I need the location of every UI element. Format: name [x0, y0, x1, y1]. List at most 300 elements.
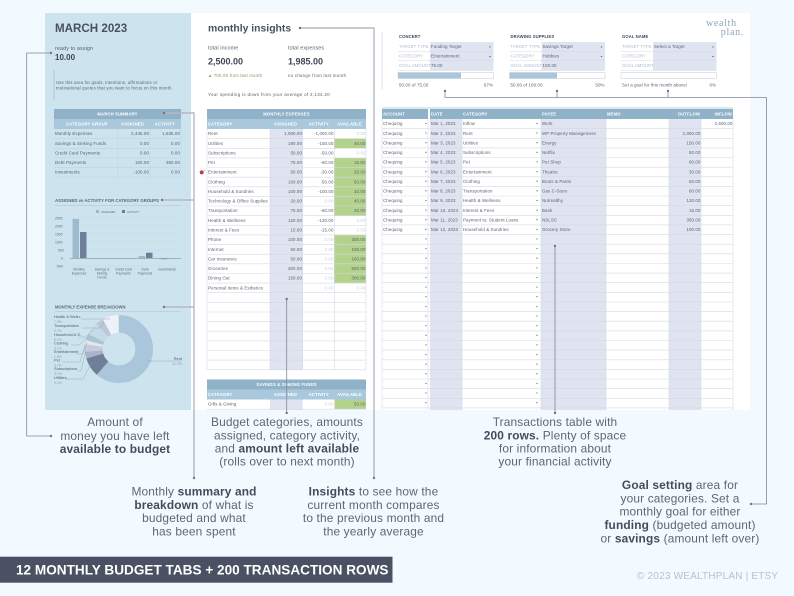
goal: concert	[398, 34, 494, 88]
panel: monthly insights: 2,500.00	[208, 56, 243, 66]
table: transactions: Energy	[542, 140, 557, 146]
table: March summary: 350.00	[166, 160, 180, 165]
chart: assigned vs activity: Credit Card	[115, 268, 132, 272]
panel: monthly insights: 1,985.00	[288, 56, 323, 66]
caption: goal setting: (budgeted amount)	[649, 518, 756, 532]
chart: assigned vs activity: ACTIVITY	[127, 210, 140, 214]
panel: monthly insights	[208, 24, 347, 97]
caption: budget categories: Budget categories, amounts	[211, 415, 363, 429]
table: transactions: Chequing	[383, 160, 403, 165]
panel: monthly insights: ▲ 700.00 from last month	[208, 73, 263, 78]
table: savings and sinking funds: ACTIVITY	[309, 392, 329, 397]
panel: monthly insights: Your spending is down from your average of 2,134.20	[208, 92, 330, 97]
goal: concert: Funding Target	[431, 44, 462, 49]
table: monthly expenses: 100.00	[288, 237, 302, 242]
goal: drawing supplies: 100.00	[542, 63, 557, 68]
table: transactions: Mar 7, 2023	[431, 179, 456, 184]
table: monthly expenses: AVAILABLE	[337, 122, 362, 126]
goal: drawing supplies	[510, 34, 605, 88]
table: monthly expenses: Personal Items & Esthetics	[208, 285, 264, 290]
chart: monthly expense breakdown: Subscriptions	[54, 366, 77, 371]
connector: transactions to caption	[554, 245, 556, 414]
note area	[54, 70, 173, 100]
logo: wealth plan: plan.	[721, 27, 744, 38]
table: transactions: Bank	[542, 208, 553, 213]
goal: concert: GOAL AMOUNT	[399, 63, 431, 68]
table: monthly expenses: 50.00	[354, 179, 366, 184]
goal: drawing supplies: CATEGORY	[510, 54, 535, 58]
table: monthly expenses: Utilities	[208, 141, 224, 146]
goals: savings and funding targets	[382, 32, 716, 90]
panel: monthly insights: total expenses	[288, 46, 324, 52]
goal: concert: TARGET TYPE	[399, 44, 429, 49]
table: transactions: 50.00	[689, 150, 701, 155]
table: March summary: Monthly Expenses	[55, 131, 93, 136]
goal: concert: CATEGORY	[399, 54, 423, 58]
caption: goal setting: monthly goal for either	[619, 504, 741, 518]
table: transactions: 50.00	[689, 179, 701, 184]
table: March summary: Credit Card Payments	[55, 150, 101, 156]
table: monthly expenses: Rent	[208, 131, 218, 136]
table: transactions: Mar 5, 2023	[431, 160, 456, 165]
table: monthly expenses: -50.00	[320, 150, 334, 156]
table: monthly expenses: Entertainment	[208, 170, 237, 175]
chart: monthly expense breakdown: 1.9%	[54, 355, 62, 359]
table: March summary	[54, 109, 181, 177]
table: monthly expenses: 150.00	[288, 276, 302, 281]
table: monthly expenses: 120.00	[288, 218, 302, 223]
table: monthly expenses: 0.00	[357, 228, 366, 232]
chart: monthly expense breakdown: 6.1%	[54, 338, 62, 342]
goal: empty goal name	[621, 34, 716, 88]
caption: transactions table: Plenty of space	[539, 428, 627, 442]
caption: transactions table: your financial activity	[498, 454, 612, 468]
table: transactions: Gas C-Store	[542, 189, 568, 194]
table: transactions: PAYEE	[542, 112, 556, 116]
goal: empty goal name: GOAL NAME	[622, 34, 649, 39]
table: monthly expenses: CATEGORY	[208, 122, 233, 126]
table: savings and sinking funds: 0.00	[325, 402, 334, 407]
table: monthly expenses: 600.00	[351, 266, 366, 271]
chart: assigned vs activity: Expenses	[72, 272, 87, 276]
table: transactions: 150.00	[686, 140, 701, 146]
table: transactions: OUTFLOW	[678, 112, 700, 116]
table: transactions: Mar 1, 2023	[431, 121, 456, 126]
table: transactions: Clothing	[463, 179, 480, 184]
table: monthly expenses: 50.00	[290, 150, 302, 156]
chart: assigned vs activity: 2500	[55, 216, 63, 220]
table: savings and sinking funds: 50.00	[354, 402, 366, 407]
table: monthly expenses: 50.00	[290, 256, 302, 261]
table: transactions: Theatre	[542, 169, 558, 174]
chart: assigned vs activity: Payments	[138, 272, 153, 276]
table: transactions: Chequing	[383, 179, 403, 184]
connector: budget categories to caption	[286, 298, 288, 414]
table: monthly expenses: 0.00	[357, 150, 366, 156]
goal: concert: 75.00	[431, 63, 443, 68]
goal: concert: Entertainment	[431, 54, 460, 58]
chart: monthly expense breakdown: Household & S..	[54, 332, 82, 337]
table: March summary: 0.00	[140, 141, 149, 146]
table: monthly expenses: -30.00	[320, 170, 334, 175]
table: monthly expenses: -1,000.00	[314, 131, 334, 136]
table: monthly expenses: 100.00	[351, 247, 366, 252]
chart: assigned vs activity: Savings &	[95, 268, 110, 272]
goal: concert: 50.00 of 75.00	[399, 82, 429, 88]
table: transactions: Work	[542, 121, 553, 126]
note area: motivational quotes that you want to focus on this month.	[56, 85, 173, 90]
goal: drawing supplies: Savings Target	[542, 44, 574, 49]
chart: monthly expense breakdown: 9.2%	[54, 381, 62, 385]
table: monthly expenses: 50.00	[290, 247, 302, 252]
caption: summary and breakdown: of what is	[198, 498, 254, 512]
table: monthly expenses: 0.00	[325, 266, 334, 271]
caption: goal setting: Goal setting area for	[622, 478, 738, 492]
table: monthly expenses: 40.00	[354, 141, 366, 146]
table: transactions: Grocery Store	[542, 227, 571, 232]
chart: monthly expense breakdown: Utilities	[54, 375, 67, 380]
table: savings and sinking funds: ASSIGNED	[274, 392, 297, 397]
table: monthly expenses: 0.00	[325, 247, 334, 252]
goal: drawing supplies: TARGET TYPE	[510, 44, 540, 49]
table: transactions: Nutrealthy	[542, 198, 564, 203]
table: transactions: NSLSC	[542, 218, 557, 222]
table: monthly expenses: 20.00	[354, 208, 366, 213]
chart: monthly expense breakdown: Health & Welln..	[54, 314, 82, 319]
caption: amount left to budget: money you have left	[60, 429, 170, 443]
goal: empty goal name: GOAL AMOUNT	[622, 63, 654, 68]
caption: budget categories: assigned, category activity,	[214, 428, 360, 442]
table: monthly expenses: 15.00	[290, 228, 302, 232]
caption: summary and breakdown: has been spent	[152, 524, 236, 538]
table: transactions: INFLOW	[715, 112, 732, 116]
caption: budget categories: (rolls over to next month)	[219, 454, 355, 468]
caption: insights: the yearly average	[323, 524, 424, 538]
table: transactions: CATEGORY	[463, 112, 488, 116]
table: monthly expenses: Pet	[208, 160, 216, 165]
table: transactions: Health & Wellness	[463, 198, 501, 203]
table: March summary: 0.00	[171, 150, 180, 156]
chart: assigned vs activity: 0	[61, 256, 63, 260]
table: monthly expenses: 300.00	[351, 276, 366, 281]
table: monthly expenses: 10.00	[354, 189, 366, 194]
caption: summary and breakdown: Monthly summary and	[131, 484, 257, 498]
chart: assigned vs activity: 500	[58, 248, 64, 252]
panel: monthly insights: total income	[208, 46, 238, 52]
table: monthly expenses: 1,000.00	[284, 131, 302, 136]
panel: monthly insights: monthly insights	[208, 24, 291, 34]
copyright: © 2023 WEALTHPLAN | ETSY	[637, 571, 778, 582]
table: monthly expenses: Internet	[208, 247, 224, 252]
table: monthly expenses: 0.00	[357, 285, 366, 290]
banner: tabs and rows: 12 MONTHLY BUDGET TABS + 200 TRANSACTION ROWS	[16, 563, 388, 578]
connector: insights to caption	[299, 27, 375, 479]
table: monthly expenses: 190.00	[288, 141, 302, 146]
table: transactions: Netflix	[542, 150, 556, 155]
connector: summary and breakdown to caption	[161, 112, 195, 479]
ready to assign amount: ready to assign	[55, 46, 93, 52]
table: monthly expenses: 100.00	[288, 189, 302, 194]
table: monthly expenses: 160.00	[351, 256, 366, 261]
table: monthly expenses: 0.00	[325, 237, 334, 242]
goal: drawing supplies: 50.00 of 100.00	[510, 82, 543, 88]
heading: March 2023: MARCH 2023	[55, 22, 128, 35]
chart: monthly expense breakdown: 3.1%	[54, 372, 62, 376]
table: transactions: Pet	[463, 160, 471, 165]
table: transactions	[382, 108, 733, 410]
table: transactions: 350.00	[686, 218, 701, 222]
table: monthly expenses: ACTIVITY	[309, 122, 329, 126]
goal: concert: CONCERT	[399, 34, 421, 39]
chart: monthly expense breakdown: 3.1%	[54, 346, 62, 350]
caption: insights: to the previous month and	[303, 511, 444, 525]
table: monthly expenses	[207, 109, 366, 370]
chart: monthly expense breakdown: Pet	[54, 358, 61, 362]
chart: assigned vs activity	[55, 198, 181, 280]
chart: assigned vs activity: ASSIGNED vs ACTIVITY FOR CATEGORY GROUPS	[55, 198, 159, 203]
banner: tabs and rows	[0, 557, 392, 583]
table: monthly expenses: 75.00	[290, 160, 302, 165]
chart: assigned vs activity: 1000	[55, 240, 63, 244]
table: monthly expenses: 40.00	[354, 199, 366, 204]
table: transactions: Chequing	[383, 189, 403, 194]
chart: monthly expense breakdown: 3.7%	[54, 364, 62, 368]
table: savings and sinking funds	[207, 380, 366, 410]
table: savings and sinking funds: CATEGORY	[208, 392, 233, 397]
table: transactions: Mar 3, 2023	[431, 140, 456, 146]
icon: red marker	[200, 170, 205, 174]
goal: empty goal name: Select a Target	[654, 44, 685, 49]
table: transactions: Subscriptions	[463, 150, 491, 155]
chart: assigned vs activity: Funds	[97, 276, 107, 280]
table: monthly expenses: 15.00	[354, 160, 366, 165]
table: monthly expenses: Phone	[208, 237, 222, 242]
caption: insights: current month compares	[307, 498, 440, 512]
table: transactions: ACCOUNT	[383, 112, 405, 116]
table: transactions: 2,500.00	[715, 121, 733, 126]
table: March summary: ACTIVITY	[155, 122, 175, 126]
table: transactions: Utilities	[463, 140, 479, 146]
table: transactions: Chequing	[383, 150, 403, 155]
goal: drawing supplies: Hobbies	[542, 54, 560, 58]
table: savings and sinking funds: Gifts & Giving	[208, 402, 237, 407]
table: monthly expenses: 0.00	[325, 199, 334, 204]
table: monthly expenses: Dining Out	[208, 276, 230, 281]
chart: assigned vs activity: ASSIGNED	[101, 210, 115, 214]
table: March summary: CATEGORY GROUP	[66, 122, 108, 126]
table: monthly expenses: Clothing	[208, 179, 225, 184]
table: transactions: Chequing	[383, 121, 403, 126]
table: March summary: 0.00	[140, 150, 149, 156]
table: savings and sinking funds: SAVINGS & SINKING FUNDS	[256, 382, 317, 387]
table: monthly expenses: Interest & Fees	[208, 228, 240, 232]
chart: assigned vs activity: Debt	[142, 268, 149, 272]
table: monthly expenses: 75.00	[290, 208, 302, 213]
table: transactions: Mar 10, 2023	[431, 208, 459, 213]
ready to assign amount	[55, 46, 93, 62]
table: savings and sinking funds: AVAILABLE	[337, 392, 362, 397]
table: monthly expenses: -50.00	[320, 179, 334, 184]
table: transactions: Chequing	[383, 131, 403, 136]
chart: assigned vs activity: 2000	[55, 224, 63, 228]
goal: drawing supplies: DRAWING SUPPLIES	[510, 34, 554, 39]
table: transactions: Mar 11, 2023	[431, 218, 458, 222]
caption: goal setting: or	[600, 532, 615, 546]
table: transactions: MEMO	[607, 112, 621, 116]
table: March summary: 0.00	[171, 141, 180, 146]
table: transactions: Mar 12, 2023	[431, 227, 459, 232]
table: transactions: Chequing	[383, 169, 403, 174]
goal: drawing supplies: GOAL AMOUNT	[510, 63, 542, 68]
table: transactions: WP Property Management	[542, 131, 597, 136]
table: transactions: Transportation	[463, 189, 493, 194]
table: transactions: 120.00	[686, 198, 701, 203]
chart: monthly expense breakdown	[54, 304, 183, 385]
table: monthly expenses: Household & Sundries	[208, 189, 254, 194]
chart: monthly expense breakdown: 61.2%	[172, 362, 182, 366]
caption: transactions table: 200 rows.	[484, 428, 539, 442]
table: transactions: Entertainment	[463, 169, 492, 174]
table: transactions: 60.00	[689, 160, 701, 165]
chart: monthly expense breakdown: 7.3%	[54, 320, 62, 324]
table: transactions: Mar 8, 2023	[431, 189, 456, 194]
caption: transactions table: Transactions table with	[493, 415, 617, 429]
table: transactions: 30.00	[689, 169, 701, 174]
table: March summary: Investments	[55, 170, 80, 175]
table: monthly expenses: 0.00	[325, 285, 334, 290]
chart: assigned vs activity: Sinking	[97, 272, 108, 276]
chart: assigned vs activity: Payments	[116, 272, 131, 276]
table: monthly expenses: Transportation	[208, 208, 238, 213]
table: transactions: Chequing	[383, 218, 403, 222]
table: March summary: 0.00	[171, 170, 180, 175]
table: monthly expenses: 50.00	[290, 170, 302, 175]
table: March summary: ASSIGNED	[121, 122, 144, 126]
table: monthly expenses: 100.00	[288, 179, 302, 184]
logo: wealth plan	[706, 18, 744, 38]
table: monthly expenses: -60.00	[320, 160, 334, 165]
table: transactions: Pet Shop	[542, 160, 561, 165]
chart: assigned vs activity: 1500	[55, 232, 63, 236]
chart: assigned vs activity: -500	[56, 264, 63, 268]
table: monthly expenses: 0.00	[325, 256, 334, 261]
caption: transactions table: for information about	[499, 442, 612, 456]
chart: monthly expense breakdown: Clothing	[54, 340, 68, 346]
chart: assigned vs activity: Monthly	[73, 268, 85, 272]
table: monthly expenses: 300.00	[288, 266, 302, 271]
chart: monthly expense breakdown: 3.7%	[54, 329, 62, 333]
table: monthly expenses: 0.00	[325, 276, 334, 281]
table: monthly expenses: 20.00	[354, 170, 366, 175]
chart: monthly expense breakdown: Rent	[174, 356, 183, 361]
table: transactions: Payment to: Student Loans	[463, 218, 519, 222]
caption: amount left to budget: Amount of	[87, 415, 143, 429]
table: transactions: Chequing	[383, 198, 403, 203]
table: monthly expenses: -120.00	[318, 218, 334, 223]
caption: budget categories: and	[215, 442, 238, 456]
table: transactions: Mar 2, 2023	[431, 131, 456, 136]
table: transactions: DATE	[431, 112, 443, 116]
table: monthly expenses: 200.00	[351, 237, 366, 242]
table: transactions: Inflow	[463, 121, 476, 126]
table: monthly expenses: MONTHLY EXPENSES	[263, 112, 310, 116]
table: monthly expenses: Health & Wellness	[208, 218, 246, 223]
table: transactions: Mar 6, 2023	[431, 169, 456, 174]
caption: goal setting: your categories. Set a	[621, 492, 740, 506]
table: transactions: 60.00	[689, 189, 701, 194]
table: monthly expenses: Technology & Office Supplies	[208, 199, 269, 204]
goal: empty goal name: TARGET TYPE	[622, 44, 652, 49]
table: transactions: Household & Sundries	[463, 227, 509, 232]
table: monthly expenses: 0.00	[357, 218, 366, 223]
chart: monthly expense breakdown: MONTHLY EXPENSE BREAKDOWN	[55, 304, 126, 310]
panel: month sidebar	[45, 13, 191, 410]
table: transactions: Chequing	[383, 140, 403, 146]
table: March summary: 1,635.00	[162, 131, 180, 136]
table: transactions: Interest & Fees	[463, 208, 495, 213]
table: transactions: Rent	[463, 131, 473, 136]
table: March summary: Debt Payments	[55, 160, 87, 165]
goal: empty goal name: Set a goal for this month above!	[622, 82, 687, 88]
caption: budget categories: amount left available	[238, 442, 359, 456]
table: transactions: Chequing	[383, 227, 403, 232]
logo: wealth plan: wealth	[706, 18, 737, 29]
table: monthly expenses: Car Insurance	[208, 256, 237, 261]
table: monthly expenses: -150.00	[318, 141, 334, 146]
spreadsheet sheet	[191, 13, 750, 410]
table: March summary: MARCH SUMMARY	[97, 112, 138, 116]
table: March summary: Savings & Sinking Funds	[55, 141, 107, 146]
goal: drawing supplies: 50%	[595, 82, 604, 88]
table: March summary: 150.00	[135, 160, 149, 165]
table: transactions: 100.00	[686, 227, 701, 232]
caption: amount left to budget: available to budget	[60, 442, 170, 456]
goal: empty goal name: CATEGORY	[622, 54, 646, 58]
caption: goal setting: savings (amount left over)	[615, 532, 760, 546]
connector: goals to goal caption	[444, 90, 766, 505]
connector: ready to assign to caption	[27, 52, 52, 437]
table: monthly expenses: ASSIGNED	[274, 122, 297, 126]
table: monthly expenses: 20.00	[290, 199, 302, 204]
table: monthly expenses: 0.00	[357, 131, 366, 136]
caption: summary and breakdown: budgeted and what	[142, 511, 246, 525]
caption: insights: Insights to see how the	[309, 484, 438, 498]
chart: monthly expense breakdown: Entertainment	[54, 349, 79, 354]
table: transactions: 15.00	[689, 208, 701, 213]
goal: empty goal name: 0%	[709, 82, 716, 88]
table: monthly expenses: -15.00	[320, 228, 334, 232]
table: monthly expenses: -100.00	[318, 189, 334, 194]
table: monthly expenses: Groceries	[208, 266, 229, 271]
table: transactions: Mar 9, 2023	[431, 198, 456, 203]
chart: assigned vs activity: Investments	[158, 268, 176, 272]
table: transactions: Chequing	[383, 208, 403, 213]
ready to assign amount: 10.00	[55, 53, 76, 62]
table: monthly expenses: Subscriptions	[208, 150, 236, 156]
table: transactions: Boots & Pants	[542, 179, 572, 184]
table: March summary: 2,445.00	[131, 131, 149, 136]
goal: concert: 67%	[484, 82, 493, 88]
caption: summary and breakdown: breakdown	[134, 498, 198, 512]
panel: monthly insights: no change from last month	[288, 73, 347, 78]
caption: goal setting: funding	[604, 518, 649, 532]
table: transactions: 1,000.00	[683, 131, 701, 136]
table: monthly expenses: -60.00	[320, 208, 334, 213]
chart: monthly expense breakdown: Transportation	[54, 323, 79, 328]
table: transactions: Mar 4, 2023	[431, 150, 456, 155]
note area: Use this area for goals, intentions, affirmations or	[56, 80, 158, 85]
table: March summary: -100.00	[133, 170, 149, 175]
